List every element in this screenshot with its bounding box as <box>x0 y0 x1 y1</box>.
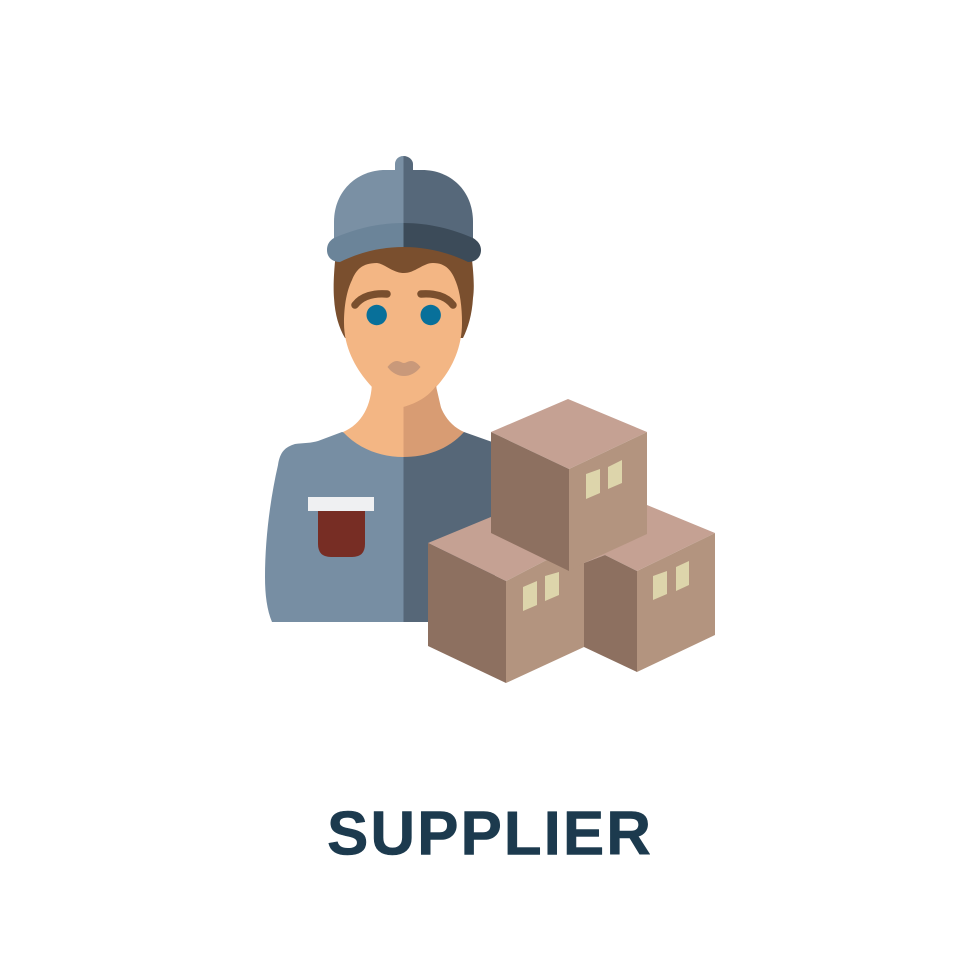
neck <box>343 380 464 457</box>
title: SUPPLIER <box>327 800 653 868</box>
shirt <box>265 432 495 622</box>
right box <box>584 505 715 672</box>
hair <box>334 236 474 338</box>
face <box>344 263 462 425</box>
top box <box>491 399 647 571</box>
shirt pocket <box>308 497 374 557</box>
cap <box>327 156 481 262</box>
icon: supplier person <box>265 156 495 622</box>
eyebrows <box>355 294 453 305</box>
icon: stacked boxes <box>428 399 715 683</box>
left box <box>428 505 584 683</box>
lips <box>388 361 420 376</box>
eyes <box>366 305 441 325</box>
